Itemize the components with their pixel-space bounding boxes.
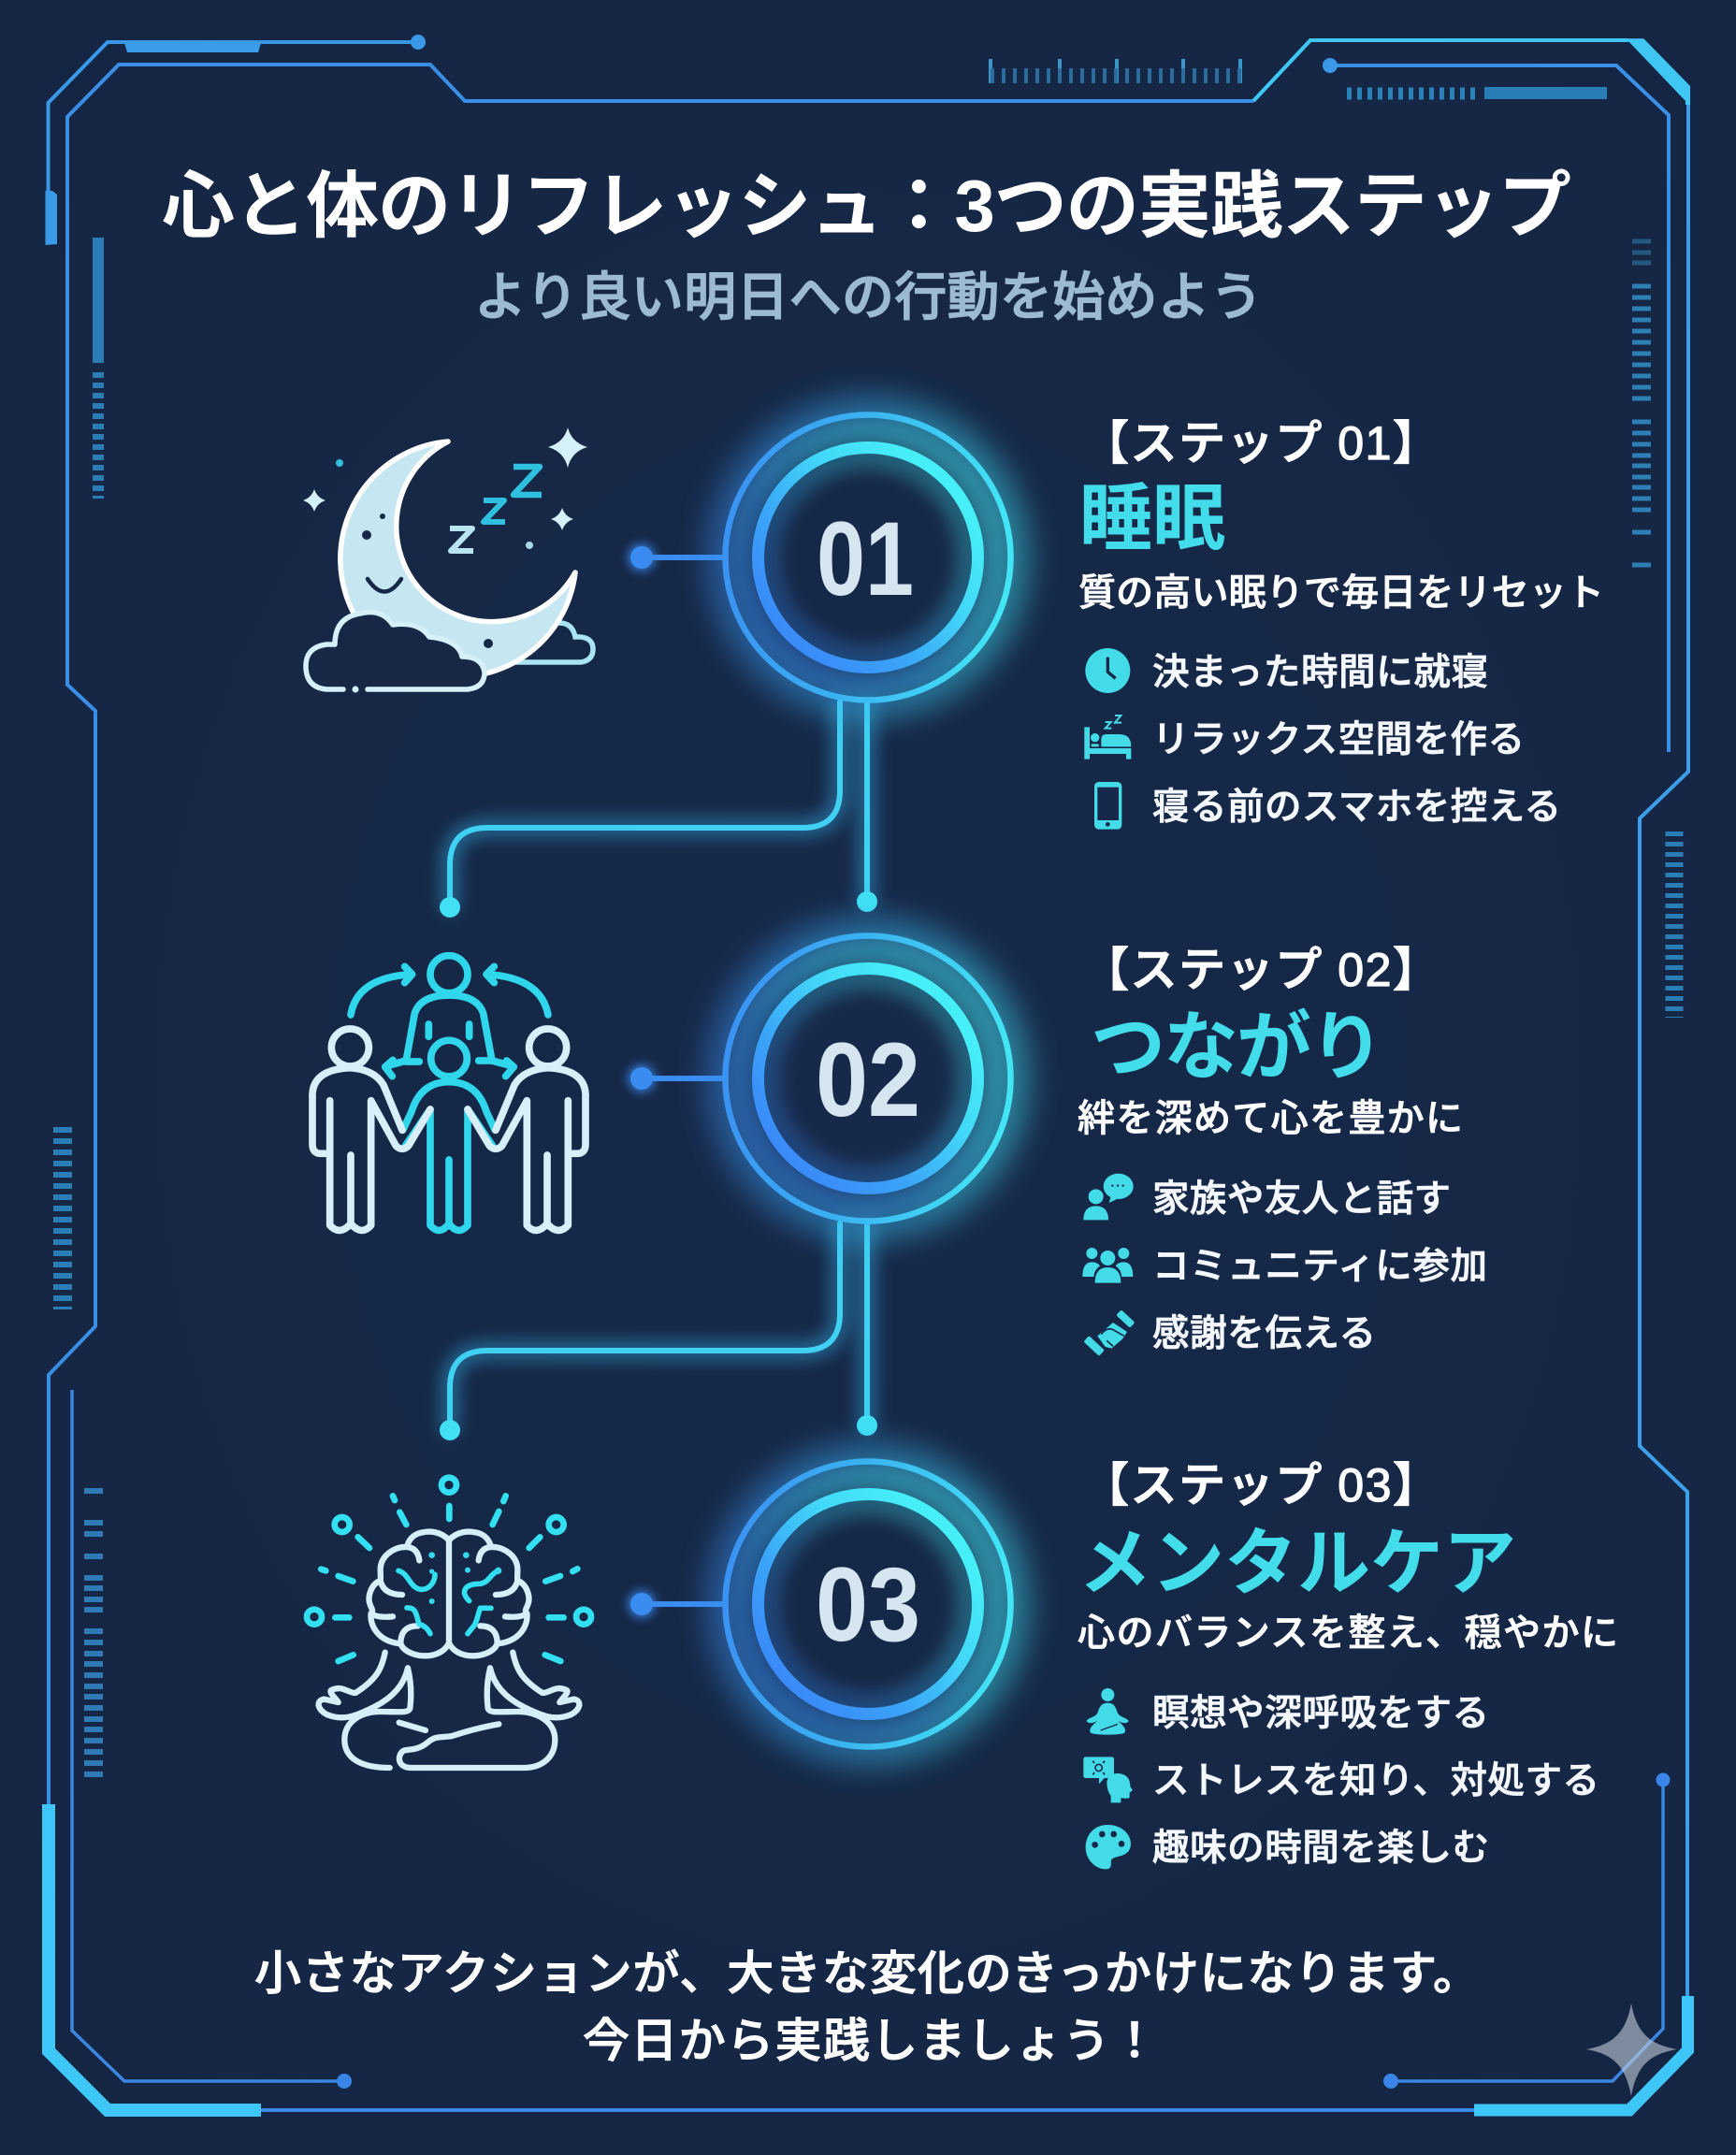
step 01 text block: 寝る前のスマホを控える [1152, 787, 1561, 828]
step 02 text block: つながり [1091, 1005, 1384, 1089]
step 01 text block: リラックス空間を作る [1152, 719, 1525, 760]
step 02 bullet icons [1082, 1174, 1135, 1356]
step 03 text block: ストレスを知り、対処する [1152, 1760, 1599, 1801]
step 03 text block: 瞑想や深呼吸をする [1152, 1693, 1489, 1734]
step 03 text block: 【ステップ 03】 [1082, 1459, 1439, 1511]
step 01 bullet icons [1084, 648, 1131, 830]
step 02 badge: 02 [816, 1021, 920, 1138]
step 03 text block: メンタルケア [1078, 1522, 1516, 1604]
step 01 text block: 睡眠 [1079, 477, 1225, 559]
icon: crescent moon with clouds [303, 427, 593, 692]
step 03 badge [628, 1458, 1014, 1750]
icon: meditating figure with brain [307, 1478, 591, 1768]
step 02 text block: 感謝を伝える [1152, 1313, 1376, 1354]
step 01 text block: 質の高い眠りで毎日をリセット [1078, 572, 1604, 614]
step 02 text block [1078, 944, 1487, 1354]
subtitle: より良い明日への行動を始めよう [474, 268, 1263, 326]
step 03 text block [1078, 1459, 1618, 1869]
title: 心と体のリフレッシュ：3つの実践ステップ [162, 165, 1571, 247]
step 02 text block: 家族や友人と話す [1152, 1179, 1451, 1220]
step 01 text block [1078, 417, 1604, 828]
footer message: 小さなアクションが、大きな変化のきっかけになります。 [254, 1947, 1480, 2000]
step 01 badge: 01 [817, 500, 914, 617]
step 02 text block: 絆を深めて心を豊かに [1078, 1098, 1463, 1139]
step 02 text block: 【ステップ 02】 [1082, 944, 1439, 996]
connector lines between steps [440, 701, 877, 1440]
step 03 text block: 趣味の時間を楽しむ [1152, 1828, 1489, 1869]
footer message: 今日から実践しましょう！ [583, 2015, 1158, 2067]
step 03 text block: 心のバランスを整え、穏やかに [1078, 1613, 1618, 1654]
icon: sparkle watermark [1586, 2003, 1677, 2096]
step 01 text block: 【ステップ 01】 [1082, 417, 1439, 470]
step 01 badge [628, 412, 1014, 703]
step 03 bullet icons [1083, 1688, 1133, 1869]
step 01 text block: 決まった時間に就寝 [1152, 652, 1488, 693]
step 02 badge [628, 933, 1014, 1224]
step 03 badge: 03 [816, 1546, 920, 1663]
footer message [254, 1947, 1480, 2067]
step 02 text block: コミュニティに参加 [1152, 1246, 1487, 1287]
icon: connected people [312, 956, 586, 1230]
